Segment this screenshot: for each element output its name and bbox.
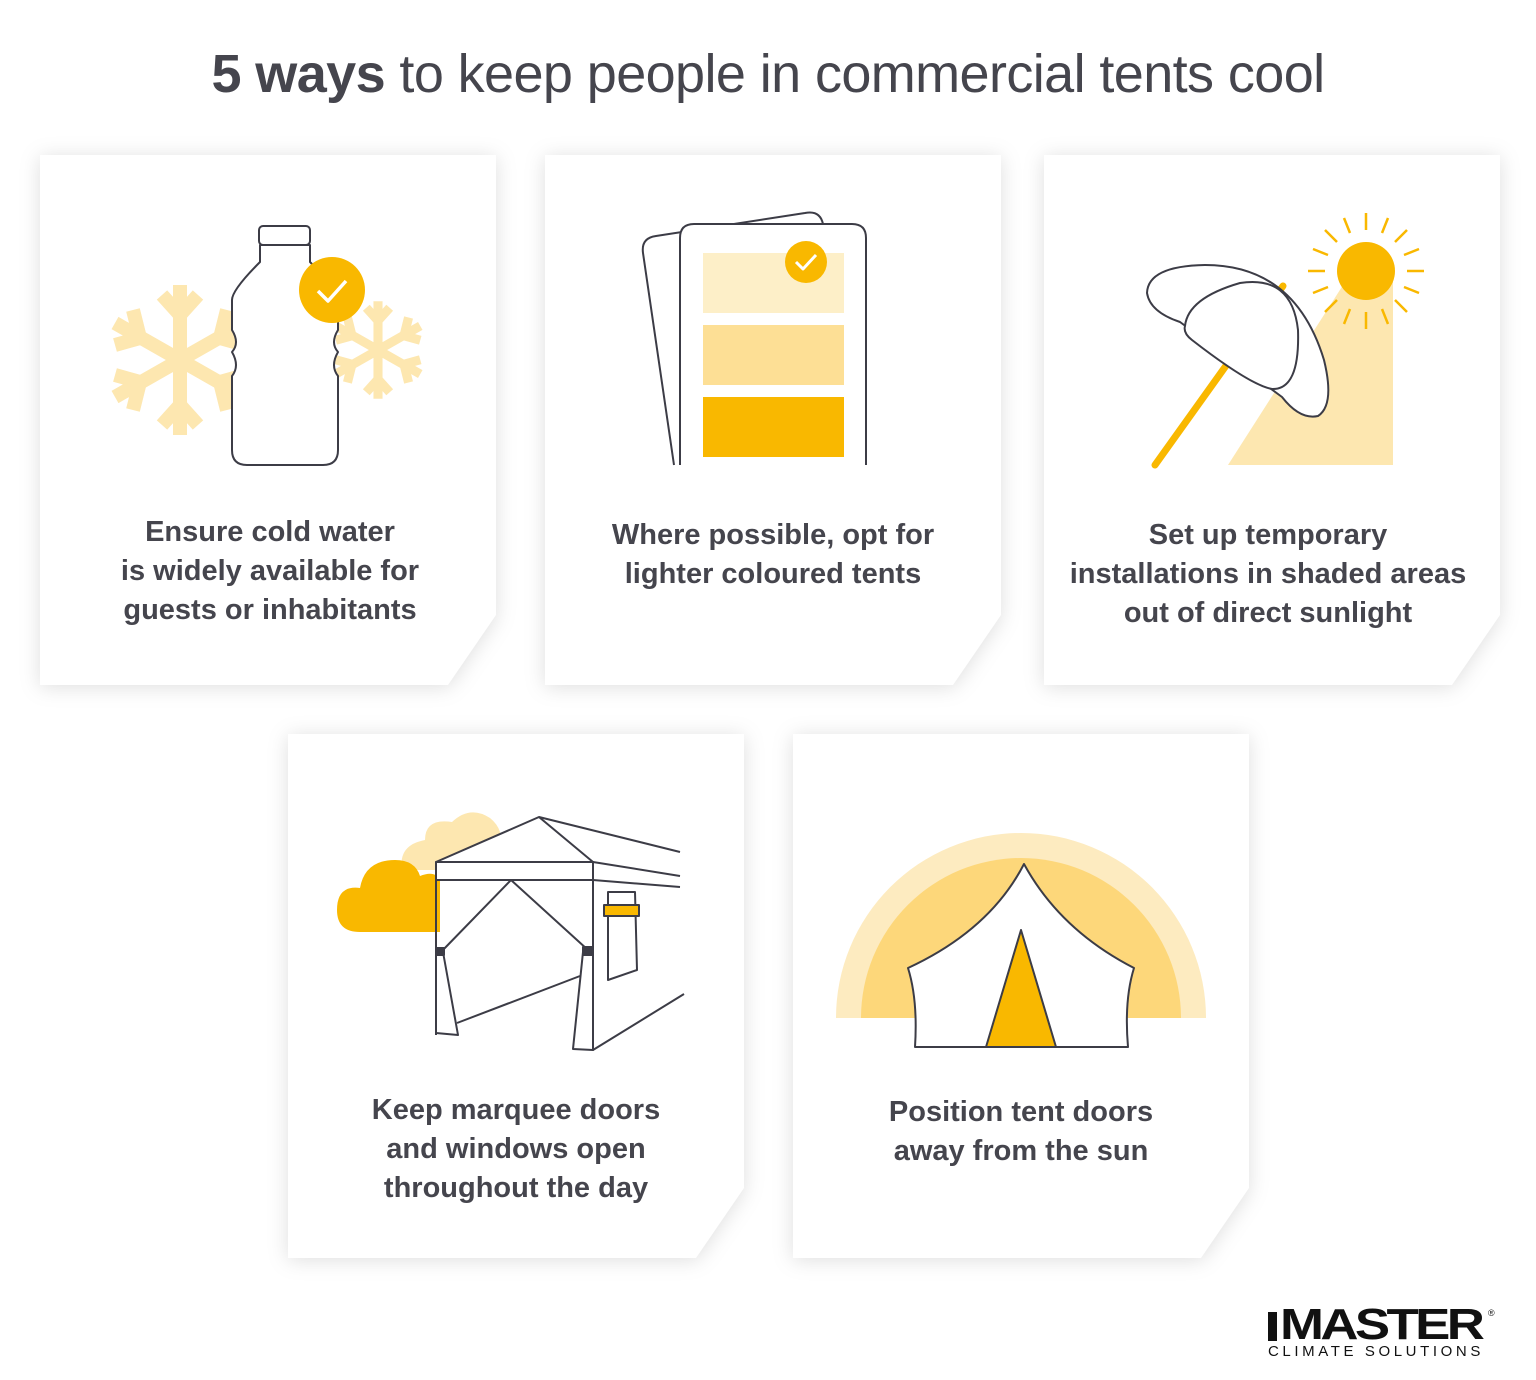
text: doors open: Keep marquee doors	[372, 1094, 660, 1126]
text: away from sun	[889, 1096, 1153, 1167]
text: away from sun: Position tent doors	[889, 1096, 1153, 1128]
text: shaded areas	[1070, 519, 1466, 629]
text: doors open	[372, 1094, 660, 1204]
panel: doors open	[282, 730, 750, 1266]
text: cold water: guests or inhabitants	[123, 594, 417, 626]
text: away from sun: away from the sun	[894, 1135, 1148, 1167]
logo: MASTER	[1280, 1300, 1481, 1349]
logo: ®	[1488, 1308, 1495, 1318]
text: cold water: Ensure cold water	[145, 516, 395, 548]
title: 5 ways to keep people in commercial tents cool	[211, 44, 1325, 104]
panel: away from sun	[786, 730, 1256, 1266]
panel: shaded areas	[1038, 150, 1506, 694]
text: cold water	[121, 516, 419, 626]
icon: umbrella and sun	[1147, 213, 1424, 465]
text: doors open: and windows open	[386, 1133, 646, 1165]
text: lighter tents	[612, 519, 934, 590]
text: shaded areas: Set up temporary	[1149, 519, 1387, 551]
panel: lighter tents	[538, 150, 1008, 694]
text: shaded areas: installations in shaded areas	[1070, 558, 1466, 590]
icon: water bottle with snowflakes	[115, 226, 420, 465]
icon: colour swatches	[643, 212, 866, 465]
text: cold water: is widely available for	[121, 555, 419, 587]
text: shaded areas: out of direct sunlight	[1124, 597, 1412, 629]
text: doors open: throughout the day	[384, 1172, 648, 1204]
text: lighter tents: Where possible, opt for	[612, 519, 934, 551]
icon: marquee with clouds	[337, 812, 684, 1050]
panel: cold water	[34, 150, 502, 694]
logo: CLIMATE SOLUTIONS	[1268, 1343, 1484, 1360]
icon: tent facing away from sun	[836, 833, 1206, 1047]
text: lighter tents: lighter coloured tents	[625, 558, 921, 590]
